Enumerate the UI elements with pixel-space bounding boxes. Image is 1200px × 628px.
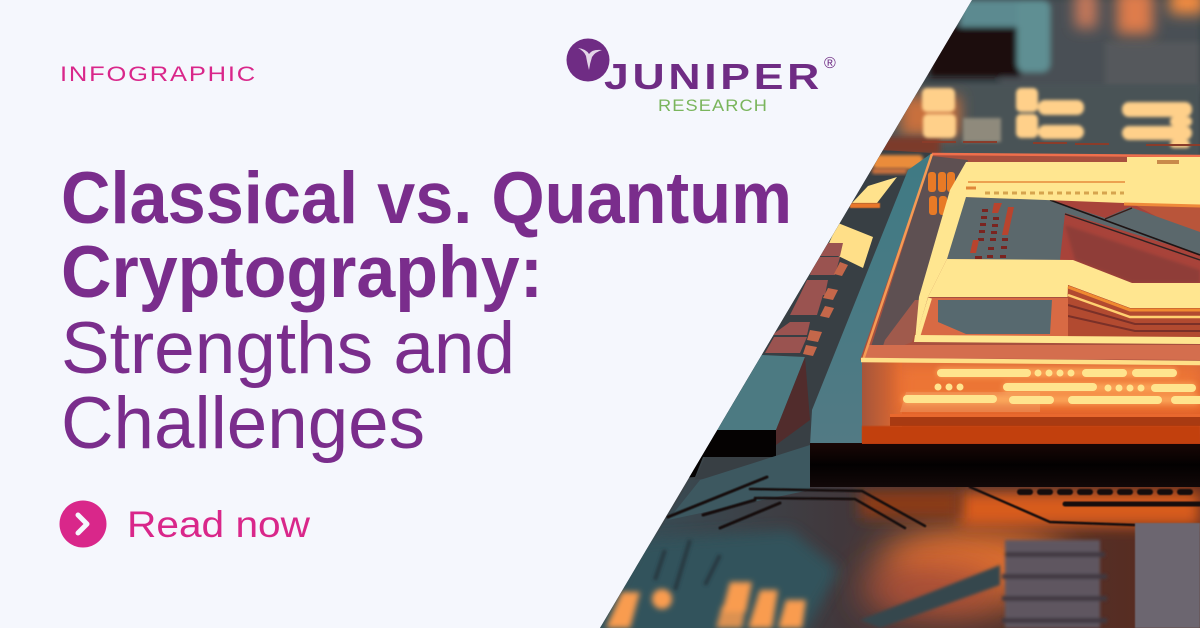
- left yellow rail: [915, 162, 966, 341]
- title: Strengths and: [61, 308, 515, 389]
- logo subtitle: RESEARCH: [658, 97, 768, 115]
- yellow lower rail: [914, 335, 1200, 344]
- dark front band: [810, 443, 1200, 487]
- glowing chip base: [862, 362, 1200, 444]
- blurred memory chip: [860, 540, 1107, 628]
- gray inset panel: [938, 300, 1052, 334]
- chip top glass surface: [860, 153, 1200, 362]
- blurred LED pads: [922, 88, 1192, 148]
- left outer board: [720, 150, 932, 424]
- pad shadows: [922, 141, 1200, 146]
- teal strip: [810, 153, 932, 445]
- tag: INFOGRAPHIC: INFOGRAPHIC: [60, 63, 257, 86]
- LED dashes on chip base: [903, 369, 1200, 404]
- blurred orange LEDs: [606, 582, 806, 628]
- red capacitors: [765, 243, 843, 353]
- teal block: [717, 355, 805, 430]
- lower board floor: [600, 470, 1200, 628]
- icon: logo circle: [566, 38, 610, 82]
- LED glow: [903, 368, 1200, 404]
- orange floor glow: [880, 527, 1070, 603]
- photo: glowing microchip: [590, 0, 1200, 628]
- icon: arrow button: [60, 500, 106, 548]
- circuit traces: [668, 477, 1200, 528]
- title: Challenges: [61, 383, 425, 464]
- logo wordmark: JUNIPER: [604, 56, 823, 97]
- lower die recess: [920, 298, 1068, 337]
- logo: Juniper Research: [566, 38, 836, 115]
- upper blurred board: [930, 0, 1200, 92]
- call to action: read now: [60, 500, 310, 548]
- title: Cryptography:: [61, 232, 543, 313]
- title: [61, 158, 792, 464]
- lower die ridges: [1066, 285, 1200, 338]
- registered mark: ®: [824, 55, 836, 72]
- die cavity: [1054, 200, 1200, 283]
- orange pads on glass: [928, 172, 955, 215]
- chip frame outline: [932, 154, 1200, 156]
- title: Classical vs. Quantum: [61, 158, 792, 239]
- right gray block: [1135, 523, 1200, 628]
- yellow die shape: [965, 157, 1200, 205]
- die pads and slots: [970, 203, 1014, 259]
- label: Read now: [127, 504, 310, 545]
- icon: yellow connector wedges: [852, 177, 897, 203]
